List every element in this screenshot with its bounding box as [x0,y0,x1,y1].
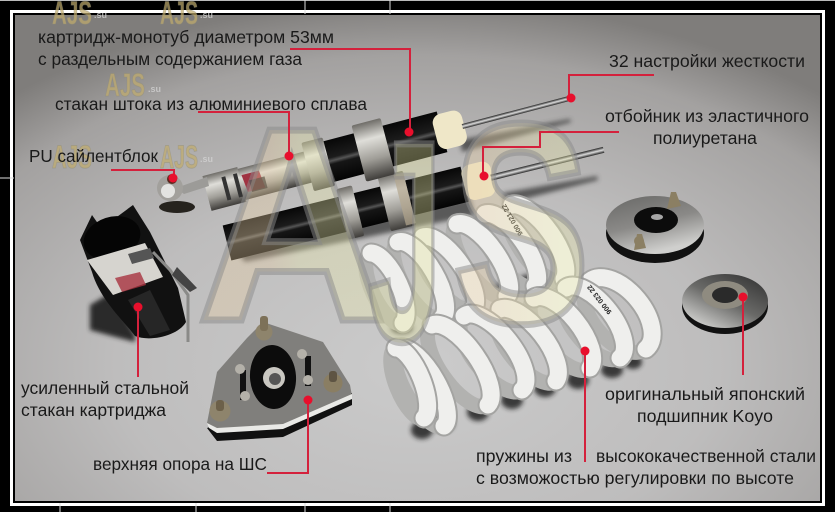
big AJS watermark: S [452,65,590,383]
small AJS watermarks: .su [94,10,107,20]
callout: PU bushing: PU сайлентблок [29,146,158,166]
callout: cartridge cup: стакан картриджа [21,400,166,420]
callout: Koyo bearing: оригинальный японский [605,384,805,404]
callout: springs [476,346,816,488]
callout: 32 stiffness settings: 32 настройки жесткости [609,51,805,71]
shock absorber: lower [220,123,610,270]
small AJS watermarks: AJS [52,139,92,175]
callout: rod cup [55,94,367,160]
callout: upper mount [93,396,312,474]
upper spring [357,193,580,334]
small AJS watermarks: .su [200,10,213,20]
callout: bump stop: полиуретана [653,128,757,148]
callout: upper mount: верхняя опора на ШС [93,454,267,474]
callout: cartridge cup: усиленный стальной [21,378,189,398]
reinforced cartridge cup [78,205,197,342]
callout: 32 stiffness settings [566,51,805,102]
callout: cartridge cup [21,302,189,420]
lower spring [383,265,665,439]
callout: cartridge monotube [38,27,414,136]
upper mount on spherical bearing [207,316,352,441]
lower spring: 900 023 22 [586,283,614,315]
frame tick marks [0,0,390,512]
small AJS watermarks [52,0,213,175]
callout: bump stop: отбойник из эластичного [605,106,809,126]
object shadows [235,119,598,262]
callout: Koyo bearing [605,292,805,426]
callout: springs: пружины из [476,446,572,466]
callout: cartridge monotube: с раздельным содержанием газа [38,49,302,69]
small AJS watermarks: .su [148,84,161,94]
shock absorber: upper [157,70,580,222]
small AJS watermarks: AJS [105,67,145,103]
big AJS watermark: J [368,83,442,401]
small AJS watermarks: AJS [160,139,198,175]
callout: bump stop [480,106,809,180]
callout: rod cup: стакан штока из алюминиевого сплава [55,94,367,114]
callout: cartridge monotube: картридж-монотуб диаметром 53мм [38,27,334,47]
upper spring: 900 021 22 [501,203,525,236]
big AJS watermark: A [197,71,387,379]
callout: springs: с возможостью регулировки по высоте [476,468,794,488]
big AJS watermark [197,65,590,401]
upper mount disc [606,192,704,263]
callout: PU bushing [29,146,178,182]
callout: springs: высококачественной стали [596,446,816,466]
small AJS watermarks: .su [200,154,213,164]
callout: Koyo bearing: подшипник Koyo [637,406,773,426]
bearing disc [682,274,768,334]
